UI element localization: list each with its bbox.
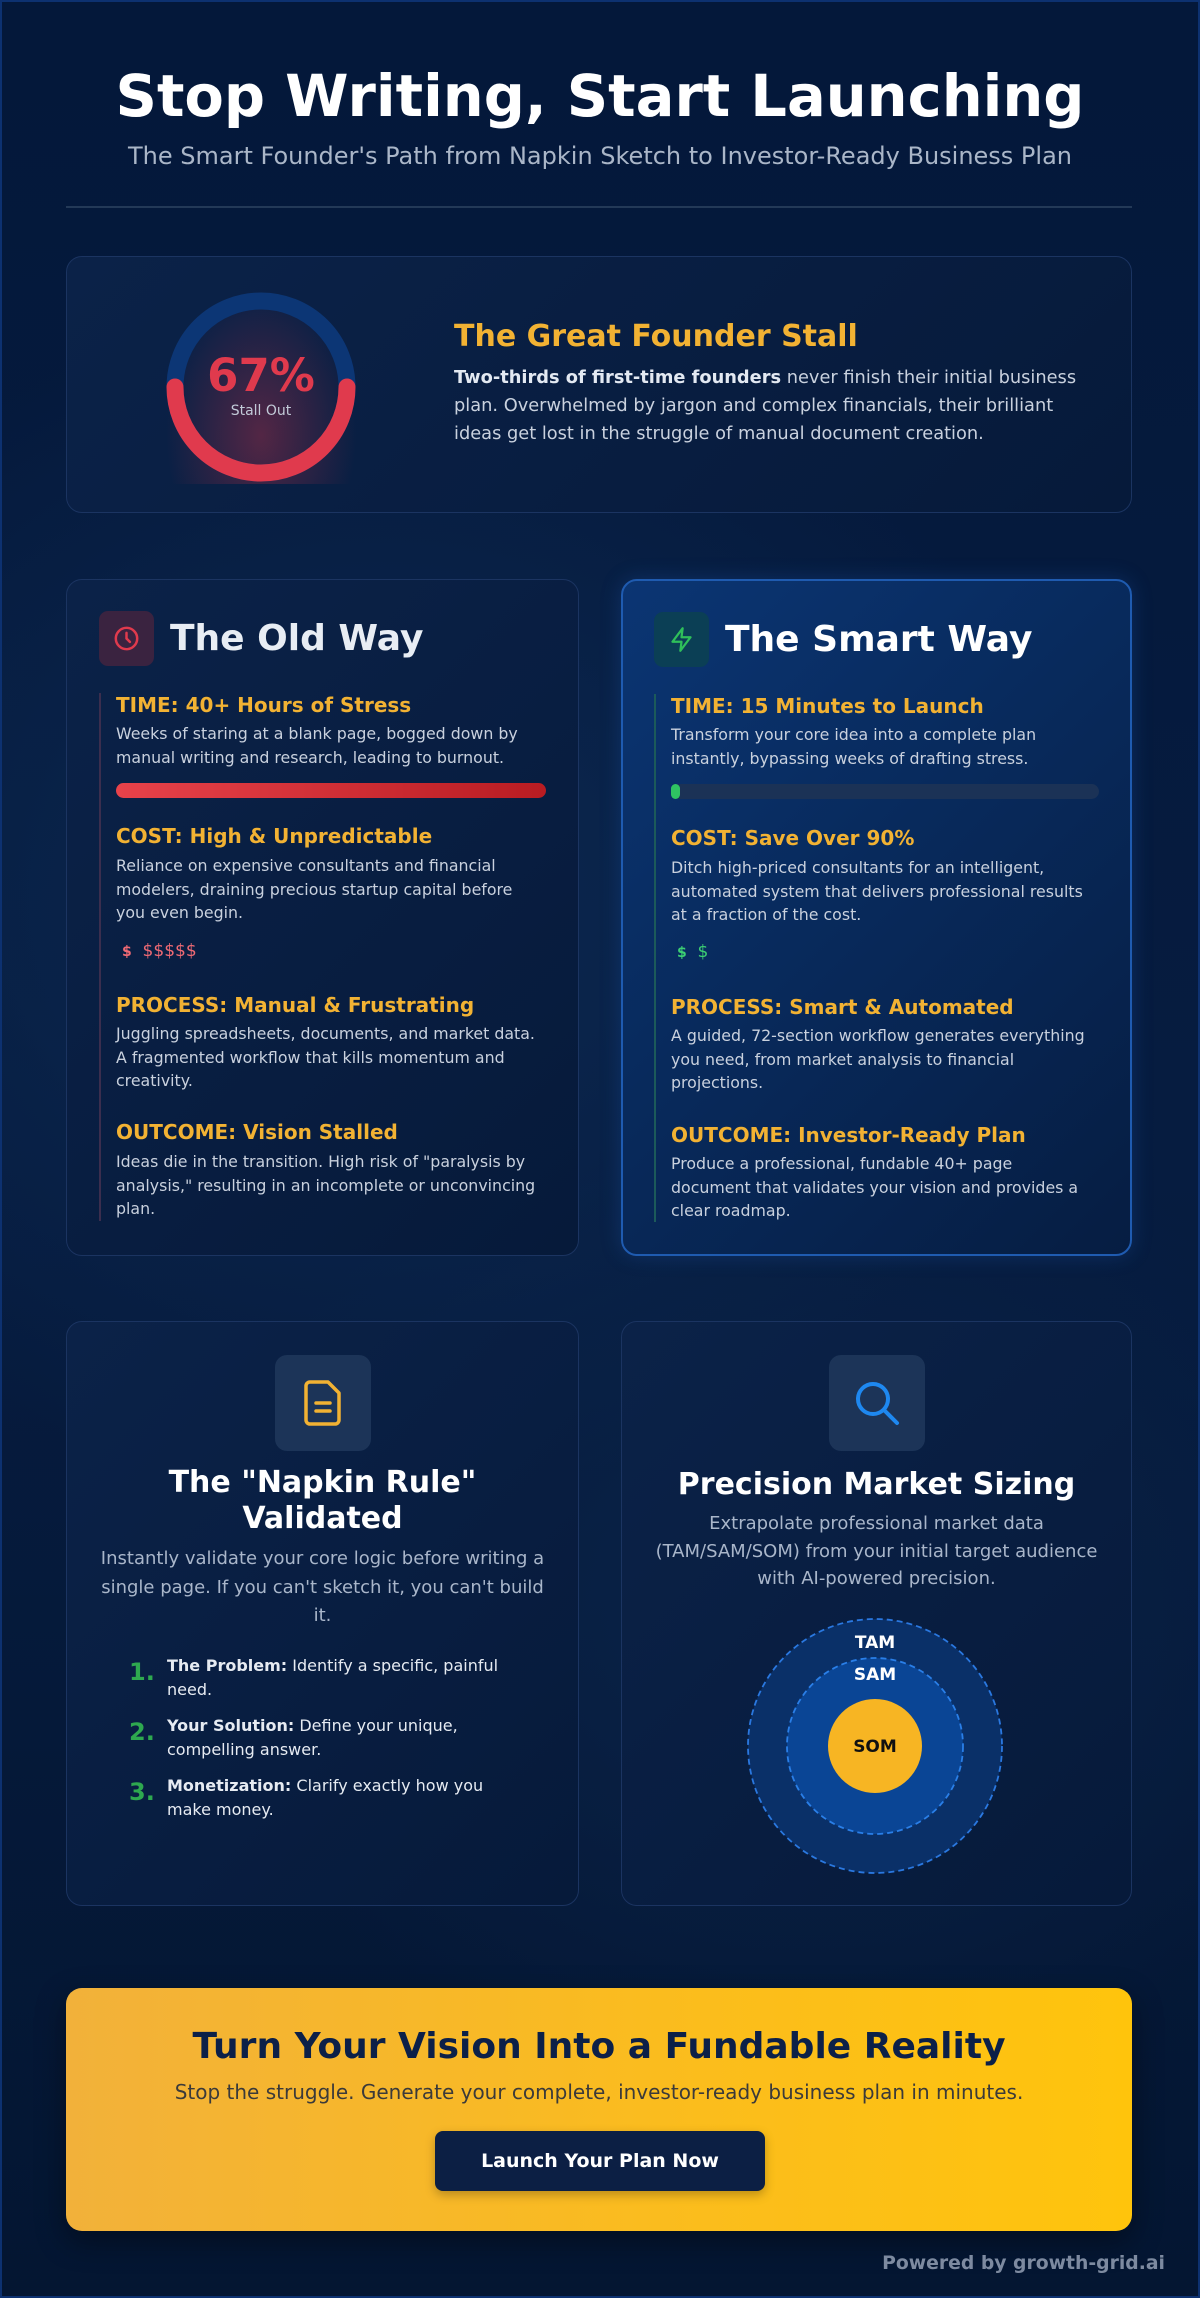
heading: Validated — [242, 1501, 403, 1536]
numbered list: Monetization: Clarify exactly how you — [167, 1776, 483, 1795]
cost indicator: $ $$$$$ — [122, 941, 197, 961]
text block — [656, 1513, 1097, 1589]
heading: The "Napkin Rule" — [169, 1465, 476, 1500]
numbered list: make money. — [167, 1800, 274, 1819]
text block: (TAM/SAM/SOM) from your initial target audience — [656, 1540, 1097, 1562]
cta heading: Turn Your Vision Into a Fundable Reality — [192, 2026, 1006, 2067]
numbered list: The Problem: Identify a specific, painful — [167, 1656, 498, 1675]
text block: Instantly validate your core logic before writing a — [101, 1548, 544, 1569]
panel: old way: manual writing and research, leading to burnout. — [116, 748, 504, 766]
concentric circles chart: SAM — [854, 1665, 896, 1685]
panel: smart way: clear roadmap. — [671, 1201, 791, 1220]
numbered list — [129, 1656, 498, 1819]
text block: it. — [314, 1605, 331, 1626]
panel: smart way: Produce a professional, fundable 40+ page — [671, 1154, 1012, 1173]
panel: old way: creativity. — [116, 1071, 193, 1090]
panel: smart way: you need, from market analysis to financial — [671, 1050, 1014, 1068]
panel: smart way — [621, 579, 1132, 1256]
numbered list: 3. — [129, 1778, 155, 1806]
item: time: TIME: 40+ Hours of Stress — [116, 693, 411, 717]
heading: The Great Founder Stall — [454, 319, 858, 354]
stat value: 67% — [207, 349, 315, 402]
panel: smart way: Ditch high-priced consultants for an intelligent, — [671, 858, 1044, 877]
concentric circles chart — [747, 1618, 1003, 1874]
heading: The Old Way — [170, 618, 423, 659]
panel: smart way: at a fraction of the cost. — [671, 905, 861, 924]
item: process: PROCESS: Manual & Frustrating — [116, 993, 474, 1017]
cta text: Stop the struggle. Generate your complete, investor-ready business plan in minutes. — [175, 2080, 1023, 2104]
item: outcome: OUTCOME: Vision Stalled — [116, 1120, 398, 1144]
text block: plan. Overwhelmed by jargon and complex financials, their brilliant — [454, 395, 1053, 416]
icon: lightning — [654, 612, 709, 667]
item: cost: COST: Save Over 90% — [671, 826, 914, 850]
numbered list: need. — [167, 1680, 212, 1699]
panel: old way: Reliance on expensive consultants and financial — [116, 856, 496, 875]
cost indicator: $ $ — [677, 942, 708, 962]
concentric circles chart: TAM — [855, 1633, 895, 1653]
panel: smart way: document that validates your vision and provides a — [671, 1178, 1078, 1196]
numbered list: compelling answer. — [167, 1740, 321, 1759]
numbered list: Your Solution: Define your unique, — [167, 1716, 458, 1735]
text block: single page. If you can't sketch it, you can't build — [101, 1576, 544, 1598]
text block: Two-thirds of first-time founders never finish their initial business — [454, 367, 1076, 388]
title: Stop Writing, Start Launching — [116, 63, 1084, 130]
panel: smart way: automated system that delivers professional results — [671, 882, 1083, 900]
numbered list: 2. — [129, 1718, 155, 1746]
gauge chart — [166, 292, 356, 484]
panel: old way: you even begin. — [116, 903, 243, 922]
icon: magnifier — [829, 1355, 925, 1451]
text block: with AI-powered precision. — [757, 1568, 996, 1589]
item: process: PROCESS: Smart & Automated — [671, 995, 1014, 1019]
panel: smart way: A guided, 72-section workflow generates everything — [671, 1026, 1085, 1045]
panel: old way: plan. — [116, 1199, 155, 1218]
item: cost: COST: High & Unpredictable — [116, 824, 432, 848]
text block: Extrapolate professional market data — [709, 1513, 1044, 1534]
panel: old way: Ideas die in the transition. High risk of "paralysis by — [116, 1152, 525, 1171]
subtitle: The Smart Founder's Path from Napkin Sketch to Investor-Ready Business Plan — [128, 142, 1072, 170]
icon: clock — [99, 611, 154, 666]
cta button — [435, 2131, 765, 2191]
text block — [454, 367, 1076, 444]
panel: old way: modelers, draining precious startup capital before — [116, 880, 512, 898]
bar: time — [671, 784, 1099, 799]
text block — [101, 1548, 544, 1626]
concentric circles chart: SOM — [853, 1737, 897, 1757]
text block: ideas get lost in the struggle of manual document creation. — [454, 423, 984, 444]
stat label: Stall Out — [231, 403, 291, 419]
bar: time — [116, 783, 546, 798]
panel: old way: A fragmented workflow that kills momentum and — [116, 1048, 505, 1066]
panel: old way: analysis," resulting in an incomplete or unconvincing — [116, 1176, 535, 1194]
item: outcome: OUTCOME: Investor-Ready Plan — [671, 1123, 1026, 1147]
panel: napkin rule — [66, 1321, 579, 1906]
item: time: TIME: 15 Minutes to Launch — [671, 694, 984, 718]
panel: old way: Juggling spreadsheets, documents, and market data. — [116, 1024, 535, 1043]
panel: market sizing — [621, 1321, 1132, 1906]
panel: smart way: Transform your core idea into a complete plan — [671, 725, 1036, 744]
heading: The Smart Way — [725, 619, 1032, 660]
heading — [168, 1465, 476, 1536]
panel: old way — [66, 579, 579, 1256]
numbered list: 1. — [129, 1658, 155, 1686]
heading: Precision Market Sizing — [678, 1467, 1075, 1502]
icon: document — [275, 1355, 371, 1451]
panel: great founder stall — [66, 256, 1132, 513]
panel: smart way: projections. — [671, 1073, 763, 1092]
panel: call to action — [66, 1988, 1132, 2231]
footer: Powered by growth-grid.ai — [882, 2253, 1165, 2274]
cta button: Launch Your Plan Now — [481, 2150, 719, 2172]
panel: smart way: instantly, bypassing weeks of drafting stress. — [671, 748, 1028, 768]
panel: old way: Weeks of staring at a blank page, bogged down by — [116, 724, 518, 743]
